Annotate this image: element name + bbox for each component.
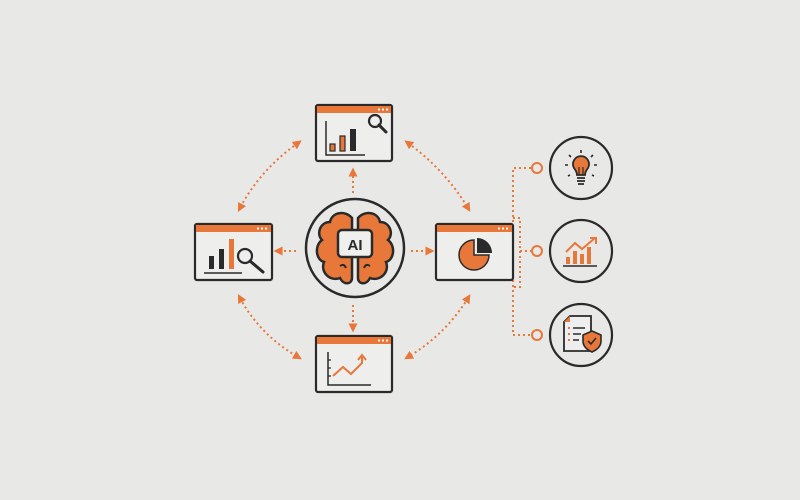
center: AI brain: AI [348, 237, 362, 254]
arrows: center spokes [278, 172, 430, 328]
window: top bar chart search [316, 105, 392, 161]
center: AI brain [306, 199, 404, 297]
window: right pie chart [436, 224, 513, 280]
icon: document with shield [550, 304, 612, 366]
window: left bar chart search [195, 224, 272, 280]
connector lines to outcomes [513, 168, 531, 335]
window: bottom line chart [316, 336, 392, 392]
icon: lightbulb [550, 137, 612, 199]
connector nodes [532, 163, 542, 340]
icon: growth chart [550, 220, 612, 282]
arrows: connections [240, 143, 468, 357]
